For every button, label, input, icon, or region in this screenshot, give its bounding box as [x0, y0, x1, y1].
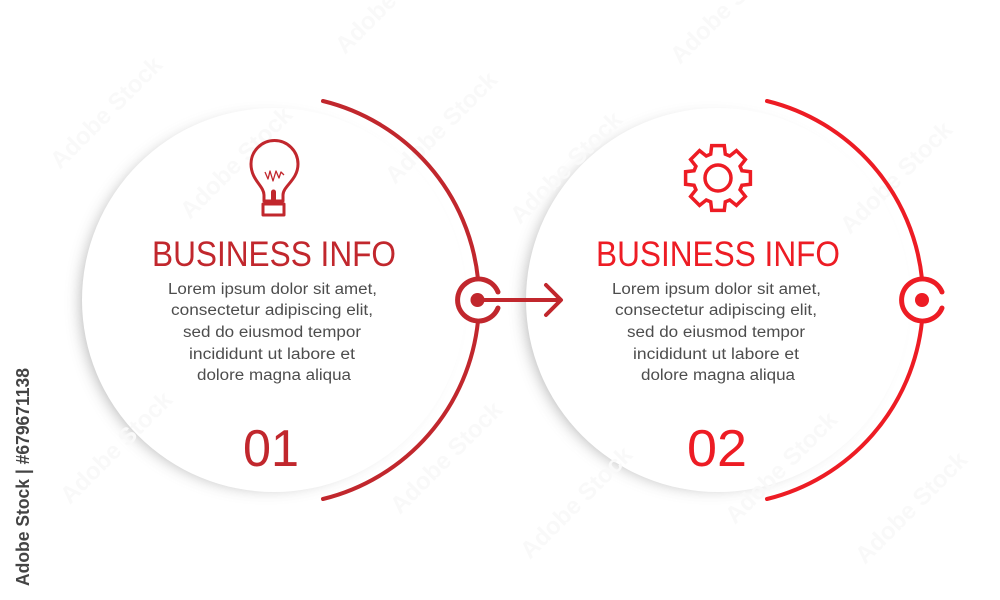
- text block: step 1: [168, 281, 377, 384]
- text block: step 2: dolore magna aliqua: [641, 367, 795, 384]
- end node: step 2: [902, 279, 942, 321]
- number: 02: 02: [687, 420, 747, 478]
- text block: step 2: sed do eiusmod tempor: [627, 324, 805, 341]
- watermark pattern: Adobe Stock: [505, 106, 628, 229]
- circle shadows: [82, 119, 894, 487]
- outer arc: step 1: [323, 101, 478, 499]
- watermark pattern: Adobe Stock: [45, 51, 168, 174]
- text block: step 1: sed do eiusmod tempor: [183, 324, 361, 341]
- stock attribution: Adobe Stock | #679671138: [13, 368, 33, 586]
- watermark pattern: Adobe Stock: [175, 101, 298, 224]
- connector node with arrow: [458, 279, 561, 321]
- heading: step 1: BUSINESS INFO: [152, 235, 396, 274]
- panel: step 1 disc: [82, 108, 466, 492]
- watermark pattern: Adobe Stock: [835, 116, 958, 239]
- watermark pattern: Adobe Stock: [55, 386, 178, 509]
- outer arc: step 2: [767, 101, 922, 499]
- text block: step 2: Lorem ipsum dolor sit amet,: [612, 281, 821, 298]
- watermark pattern: Adobe Stock: [850, 446, 973, 569]
- watermark pattern: Adobe Stock: [380, 66, 503, 189]
- watermark pattern: Adobe Stock: [720, 406, 843, 529]
- icon: light bulb: [251, 140, 298, 215]
- text block: step 2: [612, 281, 821, 384]
- number: 01: 01: [243, 420, 299, 478]
- text block: step 1: incididunt ut labore et: [189, 346, 356, 363]
- text block: step 1: Lorem ipsum dolor sit amet,: [168, 281, 377, 298]
- panel: step 2 disc: [526, 108, 910, 492]
- text block: step 2: incididunt ut labore et: [633, 346, 800, 363]
- text block: step 2: consectetur adipiscing elit,: [615, 302, 817, 319]
- watermark pattern: Adobe Stock: [385, 396, 508, 519]
- heading: step 2: BUSINESS INFO: [596, 235, 840, 274]
- text block: step 1: dolore magna aliqua: [197, 367, 351, 384]
- icon: gear: [686, 146, 750, 210]
- watermark pattern: Adobe Stock: [515, 441, 638, 564]
- text block: step 1: consectetur adipiscing elit,: [171, 302, 373, 319]
